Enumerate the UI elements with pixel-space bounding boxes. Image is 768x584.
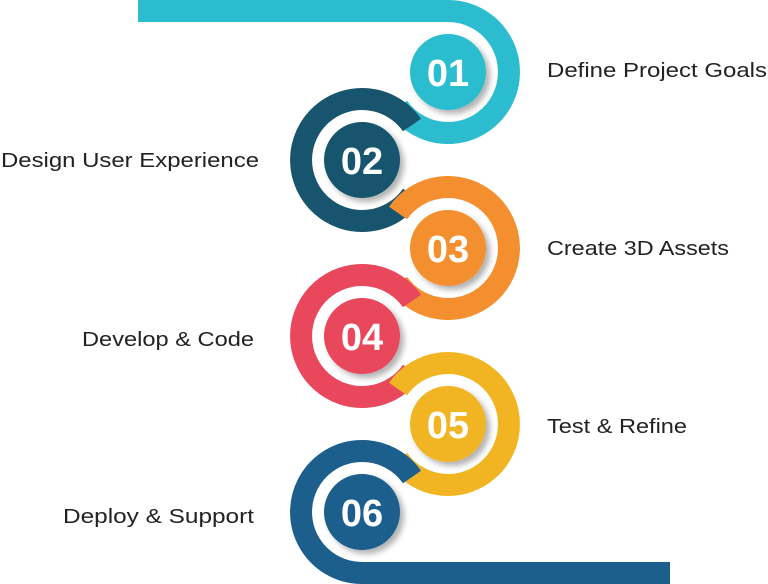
ring 01 with top bar	[138, 11, 509, 133]
circle 06: 06	[341, 493, 383, 535]
circle 02: 02	[341, 141, 383, 183]
ring 06 with bottom bar	[301, 451, 670, 573]
circle 06	[324, 474, 400, 550]
circle 02	[324, 122, 400, 198]
ring 04	[301, 275, 412, 397]
circle 01: 01	[427, 53, 469, 95]
circle 04: 04	[341, 317, 383, 359]
ring 02	[301, 99, 412, 221]
circle 05	[410, 386, 486, 462]
label 01: Define Project Goals	[547, 60, 767, 82]
circle 04	[324, 298, 400, 374]
label 02: Design User Experience	[1, 150, 259, 172]
circle 05: 05	[427, 405, 469, 447]
ring 03	[398, 187, 509, 309]
label 05: Test & Refine	[547, 416, 687, 438]
circle 03	[410, 210, 486, 286]
label 06: Deploy & Support	[63, 506, 255, 528]
circle 01	[410, 34, 486, 110]
ring 05	[398, 363, 509, 485]
label 03: Create 3D Assets	[547, 238, 729, 260]
circle 03: 03	[427, 229, 469, 271]
label 04: Develop & Code	[82, 329, 254, 351]
